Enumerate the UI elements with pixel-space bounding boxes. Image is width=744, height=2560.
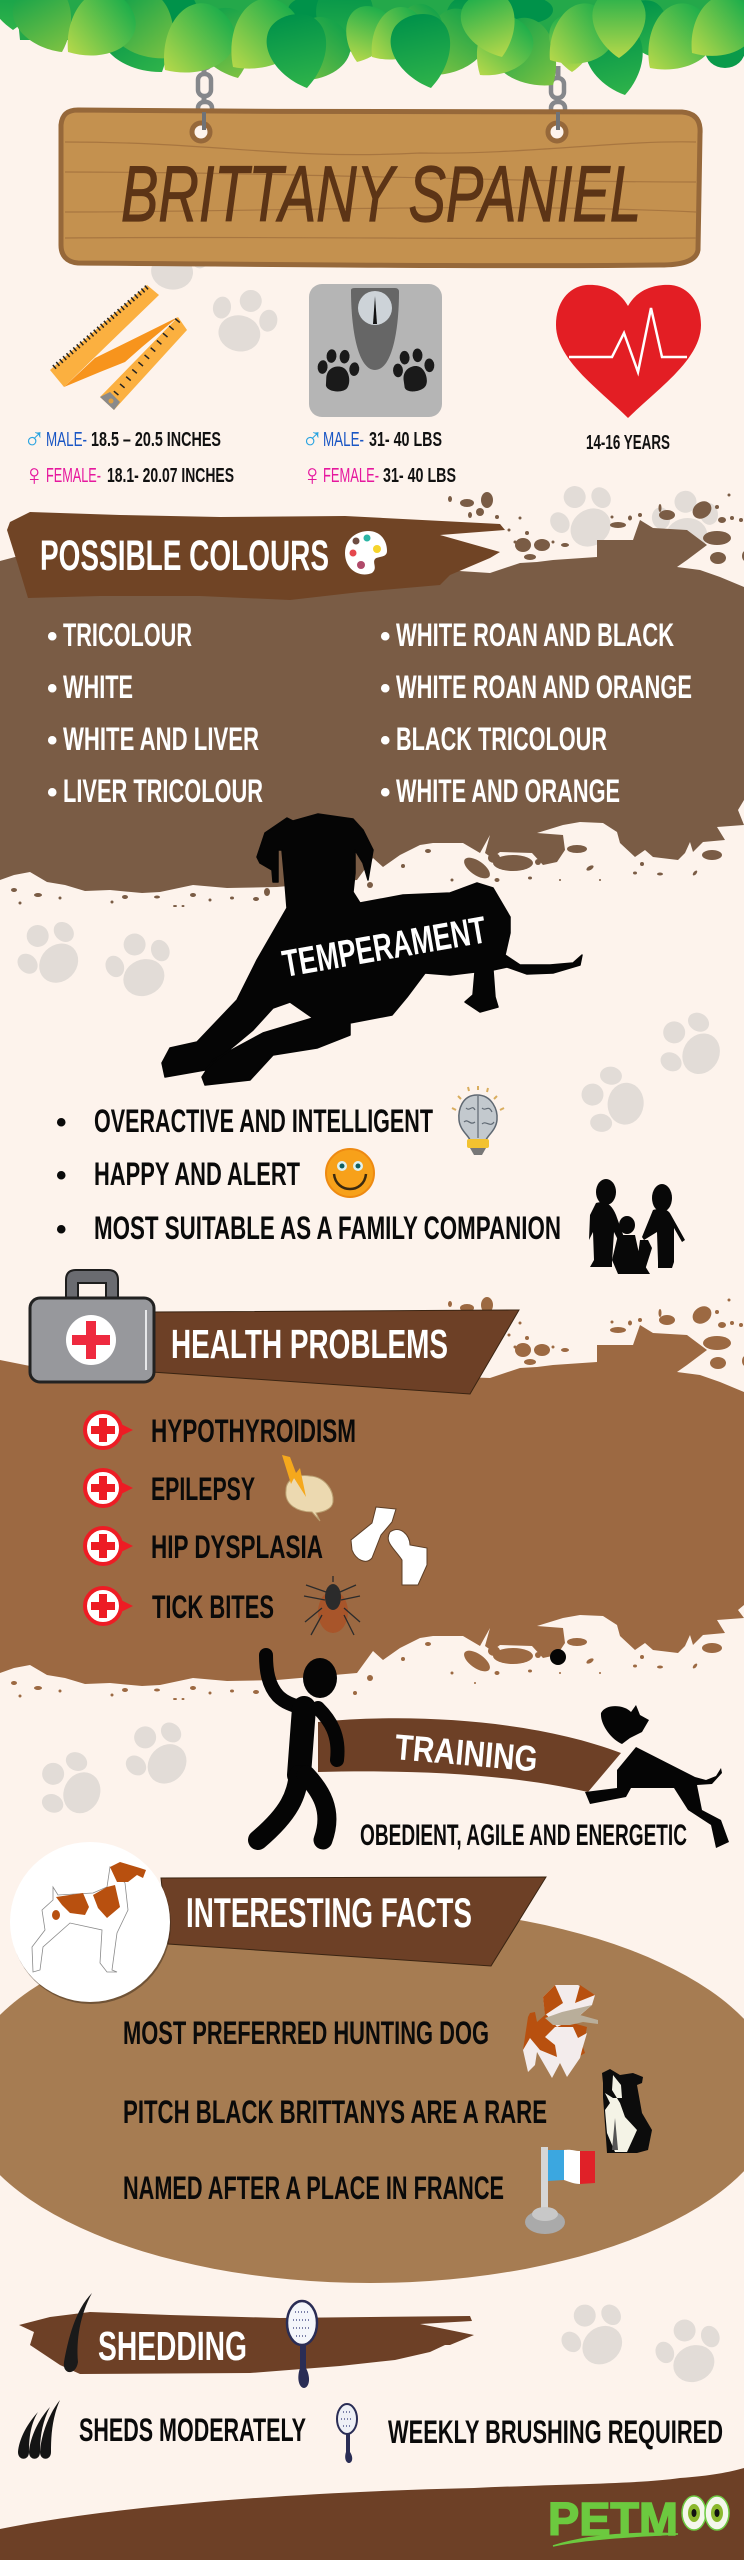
- leaves canopy: [0, 0, 744, 105]
- list: colours left: TRICOLOUR: [63, 617, 192, 653]
- icon: ball: [550, 1649, 566, 1665]
- list: colours right: •: [380, 672, 391, 705]
- icon: hair strands: [18, 2400, 60, 2459]
- height text: [23, 423, 234, 492]
- panel: temperament dog silhouette: [162, 814, 582, 1085]
- weight text: 31- 40 LBS: [383, 465, 456, 487]
- height text: ♀: [23, 459, 46, 492]
- list: temperament: [56, 1103, 561, 1246]
- icon: heart with pulse: [556, 285, 701, 418]
- list: colours right: [380, 617, 692, 809]
- icon: smiley: [326, 1149, 374, 1197]
- list: health problems: HIP DYSPLASIA: [151, 1529, 323, 1565]
- list: colours left: •: [47, 620, 58, 653]
- heading: interesting facts: INTERESTING FACTS: [186, 1889, 472, 1936]
- heading: temperament: TEMPERAMENT: [279, 909, 490, 986]
- heading: training: TRAINING: [393, 1726, 539, 1779]
- list: colours left: •: [47, 724, 58, 757]
- list: health problems: [85, 1412, 356, 1625]
- heading brush: possible colours: [7, 512, 505, 600]
- list: colours left: WHITE: [63, 669, 133, 705]
- panel: possible colours: [0, 492, 744, 907]
- icon: brain bulb: [452, 1086, 504, 1155]
- panel: training: [258, 1649, 729, 1852]
- heading brush: shedding: [19, 2312, 474, 2374]
- height text: MALE-: [46, 429, 87, 451]
- icon: hunting dog: [523, 1985, 598, 2078]
- height text: FEMALE-: [46, 465, 101, 487]
- weight text: ♀: [301, 459, 324, 492]
- icon: weighing scale: [309, 284, 442, 417]
- weight text: 31- 40 LBS: [369, 429, 442, 451]
- lifespan text: 14-16 YEARS: [586, 432, 670, 454]
- list: temperament: OVERACTIVE AND INTELLIGENT: [94, 1103, 433, 1139]
- list: temperament: MOST SUITABLE AS A FAMILY COMPANION: [94, 1210, 561, 1246]
- icon: measuring tape: [50, 285, 187, 410]
- list: facts: NAMED AFTER A PLACE IN FRANCE: [123, 2170, 504, 2206]
- list: facts: [123, 2015, 547, 2206]
- icon: france flag: [525, 2147, 595, 2234]
- list: colours left: •: [47, 672, 58, 705]
- list: temperament: •: [56, 1213, 67, 1246]
- weight text: [301, 423, 456, 492]
- icon: jumping dog: [585, 1705, 729, 1848]
- chains: [198, 48, 565, 128]
- icon: hair brush: [287, 2301, 317, 2388]
- list: health problems: EPILEPSY: [151, 1471, 255, 1507]
- icon: family silhouette: [589, 1179, 685, 1274]
- list: health problems: TICK BITES: [152, 1589, 274, 1625]
- dog badge: [10, 1842, 171, 2004]
- list: colours left: LIVER TRICOLOUR: [63, 773, 263, 809]
- icon: tick: [304, 1576, 360, 1635]
- footer band: [0, 2468, 744, 2560]
- icon: small brush: [337, 2404, 357, 2463]
- weight text: FEMALE-: [323, 465, 379, 487]
- list: colours right: WHITE AND ORANGE: [396, 773, 620, 809]
- list: facts: MOST PREFERRED HUNTING DOG: [123, 2015, 489, 2051]
- heading banner: health problems: [152, 1310, 519, 1394]
- icon: epilepsy brain: [282, 1455, 333, 1521]
- panel: interesting facts: [0, 1842, 744, 2283]
- weight text: MALE-: [323, 429, 364, 451]
- panel: shedding: [18, 2293, 723, 2463]
- list: colours left: WHITE AND LIVER: [63, 721, 259, 757]
- logo: petmoo: [548, 2493, 729, 2546]
- list: colours right: •: [380, 724, 391, 757]
- list: temperament: •: [56, 1159, 67, 1192]
- icon: person throwing ball: [258, 1655, 338, 1840]
- wooden sign: [61, 110, 700, 266]
- heading: health problems: HEALTH PROBLEMS: [171, 1321, 448, 1367]
- list: temperament: HAPPY AND ALERT: [94, 1156, 300, 1192]
- list: colours left: •: [47, 776, 58, 809]
- panel: health problems: [0, 1270, 744, 1700]
- list: facts: PITCH BLACK BRITTANYS ARE A RARE: [123, 2094, 547, 2130]
- heading banner: interesting facts: [161, 1877, 546, 1966]
- height text: 18.5 – 20.5 INCHES: [91, 429, 221, 451]
- height text: ♂: [23, 423, 46, 456]
- list: colours right: •: [380, 620, 391, 653]
- heading banner: training: [318, 1718, 621, 1792]
- icon: hip bone: [351, 1507, 427, 1585]
- text: sheds moderately: SHEDS MODERATELY: [79, 2412, 306, 2448]
- heading: shedding: SHEDDING: [98, 2323, 247, 2369]
- weight text: ♂: [301, 423, 324, 456]
- height text: 18.1- 20.07 INCHES: [107, 465, 234, 487]
- icon: hair strand: [64, 2293, 92, 2372]
- list: colours left: [47, 617, 263, 809]
- list: colours right: BLACK TRICOLOUR: [396, 721, 607, 757]
- heading: possible colours: POSSIBLE COLOURS: [40, 532, 329, 580]
- icon: palette: [345, 531, 387, 574]
- logo: petmoo: PETM: [548, 2493, 678, 2545]
- icon: first aid kit: [30, 1270, 154, 1382]
- list: health problems: HYPOTHYROIDISM: [151, 1413, 356, 1449]
- icon: black and white dog: [602, 2069, 652, 2153]
- list: colours right: •: [380, 776, 391, 809]
- list: temperament: •: [56, 1106, 67, 1139]
